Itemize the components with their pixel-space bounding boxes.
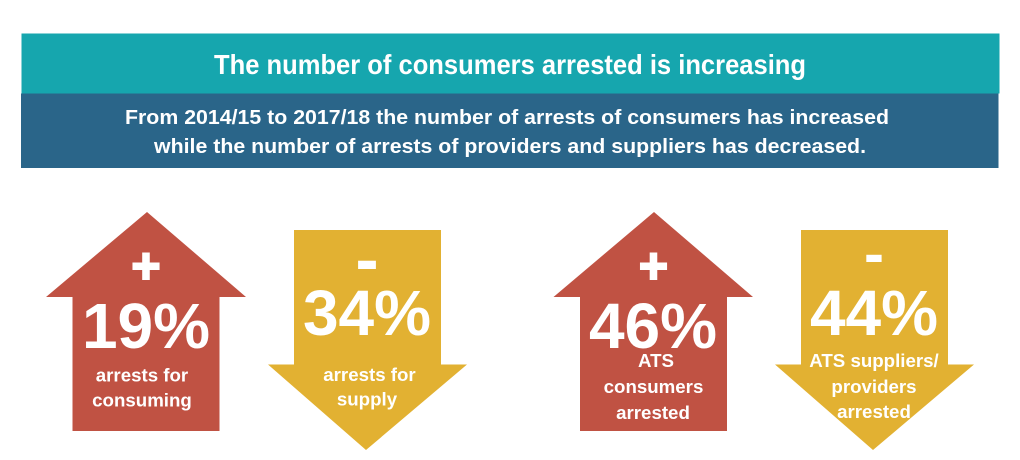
subtitle banner: From 2014/15 to 2017/18 the number of arrests of consumers has increased [125, 106, 889, 129]
up arrow: ATS consumers arrested: 46% [589, 290, 717, 362]
up arrow: ATS consumers arrested: arrested [616, 402, 690, 423]
down arrow: ATS suppliers/providers arrested: ATS suppliers/ [809, 350, 940, 371]
subtitle banner [21, 94, 998, 168]
up arrow: ATS consumers arrested [554, 212, 753, 431]
up arrow: arrests for consuming: + [131, 238, 161, 294]
down arrow: ATS suppliers/providers arrested [775, 220, 974, 450]
up arrow: ATS consumers arrested: ATS [638, 350, 674, 371]
up arrow: arrests for consuming: consuming [92, 390, 192, 410]
down arrow: arrests for supply: arrests for [323, 364, 416, 385]
up arrow: ATS consumers arrested: consumers [604, 376, 703, 397]
down arrow: arrests for supply: - [355, 220, 379, 298]
down arrow: ATS suppliers/providers arrested: 44% [810, 277, 938, 349]
title banner [22, 34, 1000, 94]
up arrow: ATS consumers arrested: + [639, 238, 668, 294]
up arrow: arrests for consuming [46, 212, 246, 431]
down arrow: ATS suppliers/providers arrested: providers [831, 376, 917, 397]
up arrow: arrests for consuming: 19% [82, 290, 210, 362]
title banner: The number of consumers arrested is increasing [214, 49, 806, 80]
down arrow: arrests for supply: 34% [303, 277, 431, 349]
down arrow: ATS suppliers/providers arrested: arrested [837, 401, 911, 422]
up arrow: arrests for consuming: arrests for [96, 364, 188, 386]
down arrow: ATS suppliers/providers arrested: - [864, 220, 884, 287]
down arrow: arrests for supply [268, 220, 467, 450]
down arrow: arrests for supply: supply [337, 388, 398, 410]
subtitle banner: while the number of arrests of providers and suppliers has decreased. [153, 135, 866, 158]
